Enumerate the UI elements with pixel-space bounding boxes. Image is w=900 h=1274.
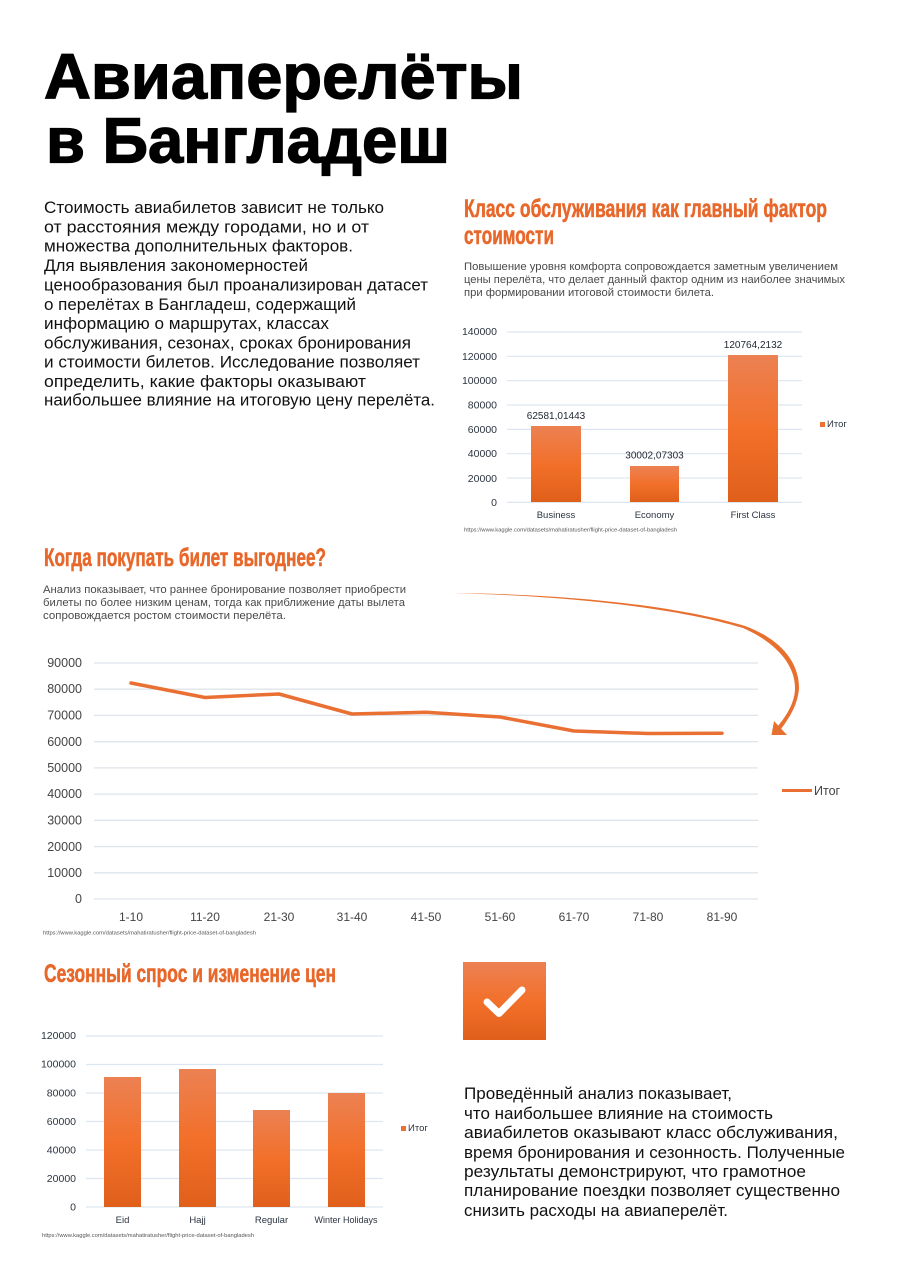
bar chart: price by season: 80000 [47,1088,76,1100]
bar chart: price by class: First Class [731,510,776,521]
intro text: и стоимости билетов. Исследование позволяет [44,354,420,372]
line chart: price by days before departure: 20000 [47,840,82,854]
intro text: наибольшее влияние на итоговую цену перелёта. [44,392,435,410]
bar chart: price by class: 40000 [468,448,497,460]
conclusion text: результаты демонстрируют, что грамотное [464,1163,806,1181]
bar chart: price by class: Business [537,510,576,521]
bar chart: price by season: 40000 [47,1144,76,1156]
title [44,40,523,176]
intro text: множества дополнительных факторов. [44,238,353,256]
title: в Бангладеш [46,104,450,176]
conclusion text: что наибольшее влияние на стоимость [464,1105,773,1123]
line chart: price by days before departure: 41-50 [411,910,442,924]
intro text: о перелётах в Бангладеш, содержащий [44,296,356,314]
line chart: price by days before departure: 80000 [47,682,82,696]
intro text [44,199,435,410]
line chart: price by days before departure: 0 [75,892,82,906]
line chart: price by days before departure: 70000 [47,708,82,722]
source link: line chart: https://www.kaggle.com/datasets/mahatiratusher/flight-price-dataset-of-bangladesh [43,930,256,936]
bar chart: price by season: Winter Holidays [314,1215,378,1226]
bar chart: price by season: 100000 [41,1058,76,1070]
arrow: curved pointer to line chart [453,593,799,735]
bar chart: price by season: 0 [70,1202,76,1214]
bar chart: price by class: 0 [491,497,497,509]
line chart: price by days before departure: 11-20 [190,910,220,924]
bar chart: price by season: Regular [255,1215,288,1226]
bar chart: price by class: 30002,07303 [625,450,684,462]
source link: seasonal chart: https://www.kaggle.com/datasets/mahatiratusher/flight-price-dataset-of-bangladesh [42,1233,254,1239]
bar chart: price by class: 62581,01443 [527,411,586,422]
booking description [43,584,406,622]
intro text: от расстояния между городами, но и от [44,218,369,236]
heading: seasonal demand: Сезонный спрос и изменение цен [44,960,336,988]
bar chart: price by class [462,326,847,521]
class description: цены перелёта, что делает данный фактор одним из наиболее значимых [464,274,846,286]
line chart: price by days before departure: 61-70 [559,910,590,924]
bar chart: price by class: 100000 [462,375,497,387]
conclusion text: время бронирования и сезонность. Полученные [464,1144,845,1162]
line chart: price by days before departure: 71-80 [633,910,664,924]
bar chart: price by class: Economy [635,510,675,521]
bar chart: price by season [41,1030,428,1226]
bar chart: price by season: Eid [116,1215,129,1226]
bar chart: price by class: 120764,2132 [724,340,783,351]
bar chart: price by class: 120000 [462,351,497,363]
class description [464,261,846,299]
line chart: price by days before departure: 10000 [47,866,82,880]
conclusion text: снизить расходы на авиаперелёт. [464,1202,728,1220]
line chart: price by days before departure: 1-10 [119,910,143,924]
line chart: price by days before departure [47,656,841,924]
line chart: price by days before departure: 51-60 [485,910,516,924]
bar chart: price by season: 20000 [47,1173,76,1185]
class description: при формировании итоговой стоимости билета. [464,287,714,299]
bar chart: price by season: Hajj [189,1215,206,1226]
line chart: price by days before departure: 90000 [47,656,82,670]
heading: class of service: стоимости [464,222,554,250]
intro text: информацию о маршрутах, классах [44,315,330,333]
icon: check mark [463,962,546,1040]
line chart: price by days before departure: 40000 [47,787,82,801]
bar chart: price by season: 60000 [47,1116,76,1128]
line chart: price by days before departure: 31-40 [337,910,368,924]
line chart: price by days before departure: 21-30 [264,910,295,924]
line chart: price by days before departure: 81-90 [707,910,738,924]
booking description: сопровождается ростом стоимости перелёта. [43,610,286,622]
line chart: price by days before departure: 50000 [47,761,82,775]
conclusion text: планирование поездки позволяет существенно [464,1182,840,1200]
booking description: билеты по более низким ценам, тогда как приближение даты вылета [43,597,406,609]
bar chart: price by class: 80000 [468,400,497,412]
booking description: Анализ показывает, что раннее бронирование позволяет приобрести [43,584,406,596]
bar chart: price by class: 20000 [468,473,497,485]
bar chart: price by class: Итог [827,419,847,430]
line chart: price by days before departure: 60000 [47,735,82,749]
conclusion text [464,1085,845,1220]
intro text: обслуживания, сезонах, сроках бронирования [44,334,411,352]
class description: Повышение уровня комфорта сопровождается заметным увеличением [464,261,838,273]
bar chart: price by season: Итог [408,1123,428,1134]
bar chart: price by class: 140000 [462,326,497,338]
source link: class chart: https://www.kaggle.com/datasets/mahatiratusher/flight-price-dataset-of-bangladesh [464,528,677,534]
line chart: price by days before departure: 30000 [47,814,82,828]
bar chart: price by class: 60000 [468,424,497,436]
intro text: Для выявления закономерностей [44,257,308,275]
conclusion text: авиабилетов оказывают класс обслуживания, [464,1124,838,1142]
intro text: Стоимость авиабилетов зависит не только [44,199,384,217]
line chart: price by days before departure: Итог [814,784,841,798]
intro text: определить, какие факторы оказывают [44,373,366,391]
conclusion text: Проведённый анализ показывает, [464,1085,732,1103]
title: Авиаперелёты [44,40,523,112]
intro text: ценообразования был проанализирован датасет [44,276,428,294]
heading: when to buy: Когда покупать билет выгоднее? [44,544,326,572]
heading: class of service [464,195,827,250]
bar chart: price by season: 120000 [41,1030,76,1042]
